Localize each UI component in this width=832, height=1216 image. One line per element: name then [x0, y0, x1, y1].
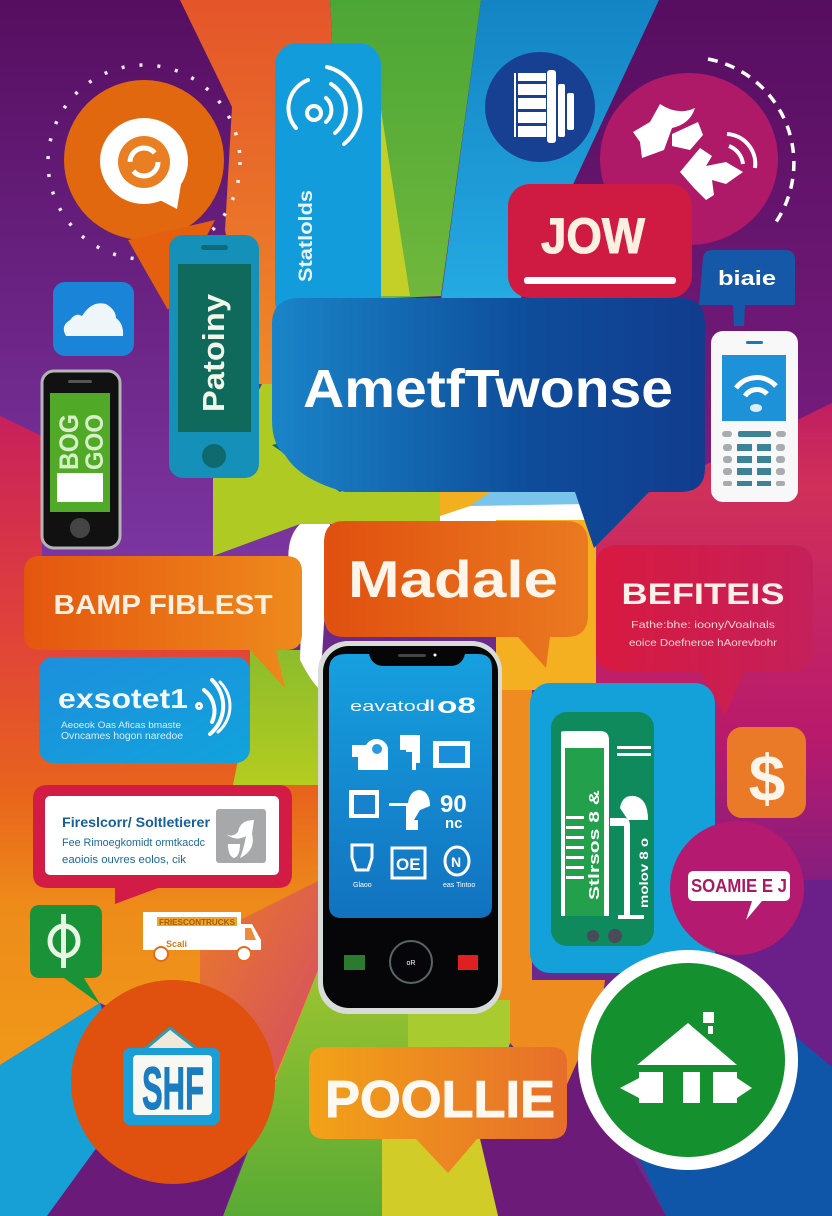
wifi symbol — [736, 378, 776, 396]
panel: small blue label — [699, 250, 795, 326]
panel: red framed white card: eaoiois ouvres eolos, cik — [62, 854, 187, 866]
screen icon row 1 — [349, 735, 475, 889]
panel: sky blue card with green phone: Stlrsos 8 & — [586, 790, 603, 900]
green key — [344, 955, 365, 970]
icon: shop sign: SHF — [142, 1055, 204, 1122]
icon: people and signal — [633, 104, 743, 200]
screen icon row 1: nc — [445, 815, 463, 832]
green phone graphic — [551, 712, 654, 946]
heading: JOW — [541, 208, 646, 264]
icon: small black phone, green screen — [42, 371, 120, 548]
icon: delivery truck — [143, 912, 261, 961]
panel: exsoter blue card: Ovncames hogon naredoe — [61, 731, 183, 742]
decorative orange speech circle top-left — [48, 65, 240, 310]
icon: white keypad phone — [711, 331, 798, 502]
panel: exsoter blue card — [39, 657, 250, 763]
icon: chat spiral — [100, 118, 188, 209]
screen icon row 1: OE — [396, 855, 421, 874]
icon: small black phone, green screen: GOO — [81, 414, 109, 470]
panel: Poollie orange bubble — [309, 1047, 567, 1173]
screen icon row 3 — [352, 845, 372, 870]
screen icon row 1: 90 — [440, 791, 467, 818]
panel: Madale orange bubble — [324, 521, 588, 668]
icon: shop sign — [123, 1028, 220, 1125]
icon: dollar tile: $ — [749, 741, 785, 815]
icon: delivery truck: Scali — [166, 939, 187, 949]
panel: orange label bubble: BAMP FIBLEST — [54, 589, 272, 620]
panel: crimson bubble with text: BEFITEIS — [622, 578, 784, 611]
panel: Madale orange bubble: Madale — [348, 551, 558, 609]
panel: red framed white card — [33, 785, 292, 904]
panel: small blue label: biaie — [718, 268, 776, 290]
panel: Poollie orange bubble: POOLLIE — [325, 1071, 555, 1129]
icon: delivery truck: FRIESCONTRUCKS — [159, 918, 236, 927]
panel: magenta circle with people and wifi — [600, 59, 794, 245]
panel: central smartphone: eavatoo — [350, 698, 428, 715]
icon: grey tile — [216, 809, 266, 863]
icon: teal phone: Patoiny — [196, 293, 231, 412]
icon: dollar tile — [727, 727, 806, 818]
panel: JOW red bubble — [508, 184, 692, 298]
panel: crimson bubble with text: eoice Doefneroe hAorevbohr — [629, 637, 778, 649]
icon: cloud tile — [53, 282, 134, 356]
panel: exsoter blue card: exsotet1 — [58, 683, 188, 714]
icon: navy circle with server — [485, 52, 595, 162]
panel: central smartphone: II — [425, 696, 434, 715]
panel: magenta circle with speech label: SOAMIE E J — [691, 876, 787, 896]
panel: crimson bubble with text — [596, 545, 813, 715]
panel: central smartphone — [318, 641, 502, 1014]
panel: red framed white card: Fireslcorr/ Soltletierer — [62, 814, 211, 830]
panel: sky blue card with green phone: molov 8 o — [637, 838, 651, 908]
panel: main title bubble — [272, 298, 705, 548]
panel: exsoter blue card: Aeoeok Oas Aficas bmaste — [61, 720, 181, 731]
icon: teal phone — [169, 235, 259, 478]
panel: sky blue card with green phone — [530, 683, 715, 973]
screen icon row 1: eas Tintoo — [443, 882, 475, 889]
panel: red framed white card: Fee Rimoegkomidt ormtkacdc — [62, 837, 205, 849]
panel: central smartphone: o8 — [437, 693, 476, 718]
title: AmetfTwonse — [303, 359, 673, 419]
vertical label: Statlolds — [296, 190, 317, 282]
home button — [390, 941, 432, 983]
icon: wifi arcs — [288, 67, 360, 144]
panel: crimson bubble with text: Fathe:bhe: ioony/Voalnals — [631, 619, 775, 631]
screen icon row 1: Glaoo — [353, 882, 372, 889]
panel: magenta circle with speech label — [670, 821, 804, 955]
panel: orange circle with shop sign — [71, 980, 275, 1184]
icon: house — [620, 1012, 752, 1103]
phone screen — [329, 654, 492, 918]
icon: signal — [196, 680, 230, 734]
panel: wifi tall blue card — [275, 43, 381, 323]
panel: central smartphone: oR — [407, 960, 415, 967]
red key — [458, 955, 478, 970]
screen icon row 1: N — [451, 854, 461, 870]
screen icon row 2 — [349, 790, 379, 818]
panel: green house circle — [578, 950, 798, 1170]
icon: green dollar tile — [30, 905, 102, 1004]
panel: orange label bubble — [24, 556, 302, 688]
icon: small black phone, green screen: BOG — [54, 414, 84, 470]
orange circle — [64, 80, 224, 240]
dotted ring around orange circle — [48, 65, 240, 259]
keypad — [737, 431, 771, 486]
dashed ring — [708, 59, 794, 222]
